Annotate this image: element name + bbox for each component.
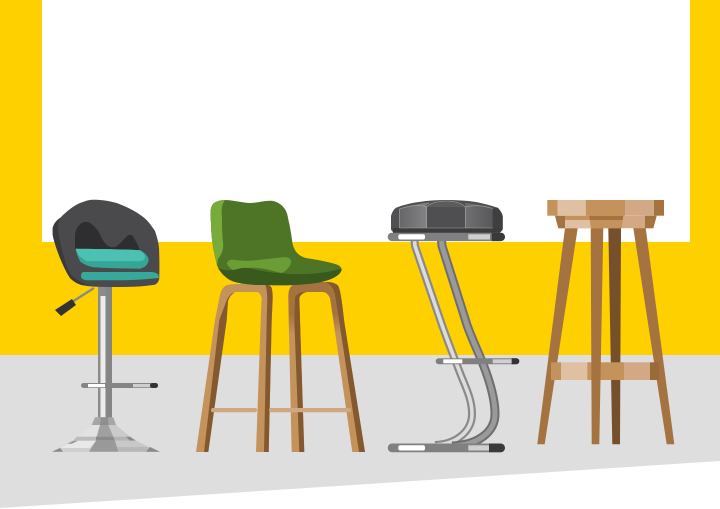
foot bar [436,358,519,364]
background: grey floor [0,355,720,509]
front wooden leg frame [196,284,273,452]
front centre leg [591,228,603,444]
stool 4: wooden four-leg stool [537,200,674,444]
base bar [388,444,505,452]
footrest ring [81,383,158,388]
right leg [633,228,674,444]
green shell [210,200,341,285]
backrest cut-out [75,222,140,250]
front cushion [81,272,159,280]
upholstered round seat [391,200,503,233]
apron under the top [555,216,657,228]
height lever [55,288,94,316]
back wooden leg frame [288,282,365,452]
backrest shell [53,200,159,287]
star base [52,417,160,452]
left leg [537,228,578,444]
background: white bottom wedge [0,461,720,509]
stool 1: black swivel chair with teal cushions [52,200,160,452]
Z tube front [442,240,495,446]
light green back edge [210,200,225,265]
seat top [547,200,664,216]
stool 2: green seat wooden legs [196,200,365,452]
background: white window [42,0,690,242]
dark green seat underside [218,268,342,285]
cross rail [551,362,659,380]
pole [98,286,112,420]
seat plate [388,233,505,241]
stool 3: chrome Z-frame stool [388,200,519,452]
seat highlight [227,257,291,273]
cross rail [211,408,351,412]
Z tube rear [414,240,472,445]
seat cushion [76,249,149,269]
rear dark leg [608,228,621,444]
